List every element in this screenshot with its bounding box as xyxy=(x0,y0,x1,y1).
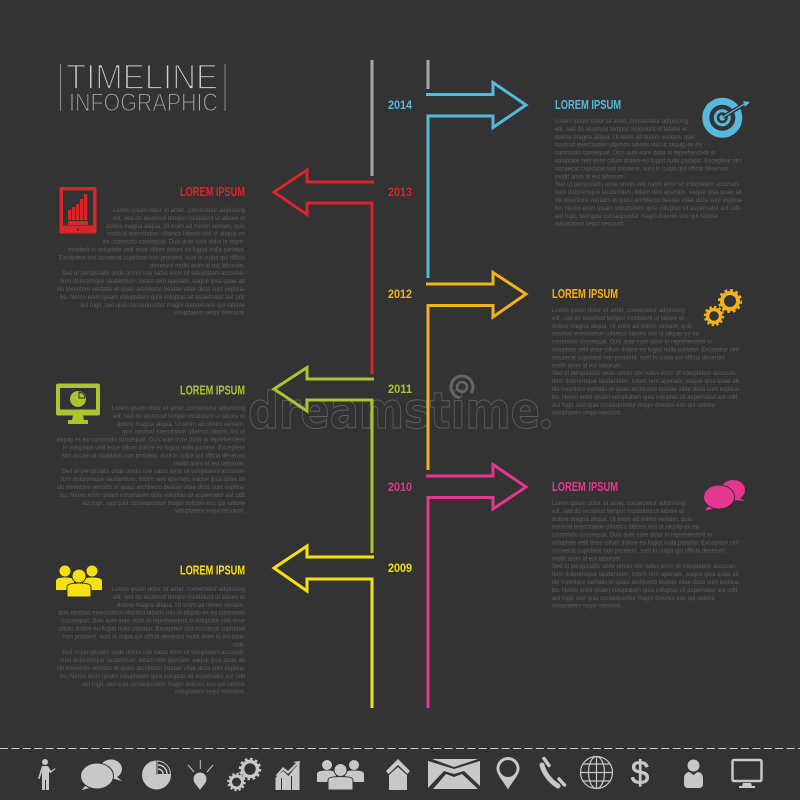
text block: 2014: illo inventore veritatis et quasi architecto beatae vitae dicta sunt explica- xyxy=(555,198,743,204)
text block: 2013: tium doloremque laudantium, totam rem aperiam, eaque ipsa quae ab xyxy=(60,279,246,285)
icon: target xyxy=(706,101,750,134)
timeline start segment: right xyxy=(426,60,430,89)
title xyxy=(60,58,226,117)
text block: 2011: Sed ut perspiciatis unde omnis iste natus error sit voluptatem accusan- xyxy=(62,469,245,475)
arrow: 2011 xyxy=(274,368,374,553)
year labels: 2012 xyxy=(388,289,412,301)
icon: dollar: $ xyxy=(631,754,649,791)
footer icon row xyxy=(38,754,762,791)
text block: 2012: aut fugit, sed quia consequuntur magni dolores eos qui ratione xyxy=(552,403,716,409)
text block: 2009: quis nostrud exercitation ullamco laboris nisi ut aliquip ex ea commodo xyxy=(58,611,246,617)
text block: 2012: mollit anim id est laborum. xyxy=(552,363,622,369)
icon: team xyxy=(317,760,364,790)
text block: 2013: dolore magna aliqua. Ut enim ad minim veniam, quis xyxy=(106,224,245,230)
text block: 2012: voluptatem sequi nesciunt. xyxy=(552,411,622,417)
text block: 2013: ea commodo consequat. Duis aute irure dolor in repre- xyxy=(103,240,245,246)
text block: 2009: bo. Nemo enim ipsam voluptatem quia voluptas sit aspernatur aut odit xyxy=(60,674,245,680)
panel: 2009 xyxy=(56,562,246,696)
text block: 2009: illo inventore veritatis et quasi architecto beatae vitae dicta sunt explica- xyxy=(57,666,245,672)
title: INFOGRAPHIC xyxy=(69,89,218,117)
text block: 2010: illo inventore veritatis et quasi architecto beatae vitae dicta sunt explica- xyxy=(552,580,740,586)
year labels: 2014 xyxy=(388,100,413,112)
text block: 2010: bo. Nemo enim ipsam voluptatem quia voluptas sit aspernatur aut odit xyxy=(552,588,737,594)
text block: 2012: dolore magna aliqua. Ut enim ad minim veniam, quis xyxy=(552,324,692,330)
icon: telephone xyxy=(542,758,564,786)
panel: 2014 xyxy=(555,97,750,228)
text block: 2012: commodo consequat. Duis aute irure dolor in reprehenderit in xyxy=(552,340,712,346)
text block: 2011: aliquip ex ea commodo consequat. Duis aute irure dolor in reprehenderit xyxy=(56,438,245,444)
panel: 2011 xyxy=(56,382,246,515)
arrow: 2013 xyxy=(274,170,374,374)
text block: 2014: aut fugit, sed quia consequuntur magni dolores eos qui ratione xyxy=(555,214,719,220)
text block: 2012: Sed ut perspiciatis unde omnis iste natus error sit voluptatem accusan- xyxy=(552,371,737,377)
text block: 2014: Sed ut perspiciatis unde omnis iste natus error sit voluptatem accusan- xyxy=(555,182,740,188)
arrow: 2009 xyxy=(274,546,374,708)
icon: monitor xyxy=(732,760,762,788)
text block: 2011: bo. Nemo enim ipsam voluptatem quia voluptas sit aspernatur aut odit xyxy=(60,493,245,499)
text block: 2012 xyxy=(552,308,740,417)
icon: presenter xyxy=(38,759,56,790)
text block: 2013: Lorem ipsum dolor sit amet, consectetur adipiscing xyxy=(113,208,245,214)
text block: 2009: cillum dolore eu fugiat nulla pariatur. Excepteur sint occaecat cupidatat xyxy=(58,626,245,632)
text block: 2014 xyxy=(555,119,743,228)
text block: 2011: sint occaecat cupidatat non proident, sunt in culpa qui officia deserunt xyxy=(62,453,245,459)
heading: 2014: LOREM IPSUM xyxy=(555,97,621,112)
heading: 2011: LOREM IPSUM xyxy=(180,382,245,398)
text block: 2009: non proident, sunt in culpa qui officia deserunt mollit anim id est labo- xyxy=(63,634,245,640)
text block: 2013: henderit in voluptate velit esse cillum dolore eu fugiat nulla pariatur. xyxy=(68,248,245,254)
heading: 2009: LOREM IPSUM xyxy=(180,562,245,578)
text block: 2010 xyxy=(552,501,740,610)
text block: 2014: voluptate velit esse cillum dolore eu fugiat nulla pariatur. Excepteur sint xyxy=(555,158,742,164)
text block: 2013: elit, sed do eiusmod tempor incididunt ut labore et xyxy=(113,216,245,222)
text block: 2011: dolore magna aliqua. Ut enim ad minim veniam, xyxy=(117,422,245,428)
watermark: dreamstime xyxy=(248,382,540,440)
heading: 2010: LOREM IPSUM xyxy=(552,479,618,494)
icon: speech bubbles xyxy=(704,480,745,510)
text block: 2014: tium doloremque laudantium, totam rem aperiam, eaque ipsa quae ab xyxy=(555,190,743,196)
icon: house xyxy=(386,759,410,790)
text block: 2013: nostrud exercitation ullamco laboris nisi ut aliquip ex xyxy=(107,232,245,238)
text block: 2010: commodo consequat. Duis aute irure dolor in reprehenderit in xyxy=(552,533,712,539)
text block: 2010: Lorem ipsum dolor sit amet, consectetur adipiscing xyxy=(552,501,685,507)
text block: 2010: aut fugit, sed quia consequuntur magni dolores eos qui ratione xyxy=(552,596,716,602)
text block: 2009: rum. xyxy=(233,642,245,648)
text block: 2014: dolore magna aliqua. Ut enim ad minim veniam, quis xyxy=(555,135,695,141)
text block: 2011: tium doloremque laudantium, totam rem aperiam, eaque ipsa quae ab xyxy=(60,477,246,483)
text block: 2013: illo inventore veritatis et quasi architecto beatae vitae dicta sunt explica- xyxy=(57,287,245,293)
icon: monitor xyxy=(56,384,100,424)
text block: 2011: quis nostrud exercitation ullamco laboris nisi ut xyxy=(122,430,245,436)
year labels: 2013 xyxy=(388,187,412,199)
year labels: 2009 xyxy=(388,563,412,575)
text block: 2014: Lorem ipsum dolor sit amet, consectetur adipiscing xyxy=(555,119,688,125)
text block: 2012: Lorem ipsum dolor sit amet, consectetur adipiscing xyxy=(552,308,685,314)
heading: 2012: LOREM IPSUM xyxy=(552,286,618,301)
text block: 2011: voluptatem sequi nesciunt. xyxy=(175,509,245,515)
text block: 2014: voluptatem sequi nesciunt. xyxy=(555,222,625,228)
text block: 2013: deserunt mollit anim id est laborum. xyxy=(150,263,245,269)
text block: 2009: Sed ut perspiciatis unde omnis iste natus error sit voluptatem accusan- xyxy=(62,650,245,656)
year labels: 2011 xyxy=(388,384,413,396)
text block: 2011: Lorem ipsum dolor sit amet, consectetur adipiscing xyxy=(112,406,245,412)
text block: 2013 xyxy=(57,208,246,317)
text block: 2012: bo. Nemo enim ipsam voluptatem quia voluptas sit aspernatur aut odit xyxy=(552,395,737,401)
text block: 2011: mollit anim id est laborum. xyxy=(174,461,245,467)
text block: 2010: elit, sed do eiusmod tempor incididunt ut labore et xyxy=(552,509,684,515)
arrow: 2014 xyxy=(426,82,526,278)
text block: 2009: voluptatem sequi nesciunt. xyxy=(175,690,245,696)
text block: 2009: dolore magna aliqua. Ut enim ad minim veniam, xyxy=(117,603,245,609)
year labels: 2010 xyxy=(388,482,412,494)
text block: 2009: tium doloremque laudantium, totam rem aperiam, eaque ipsa quae ab xyxy=(60,658,246,664)
panel: 2012 xyxy=(552,286,741,417)
text block: 2010: nostrud exercitation ullamco laboris nisi ut aliquip ex ea xyxy=(552,525,700,531)
text block: 2012: tium doloremque laudantium, totam rem aperiam, eaque ipsa quae ab xyxy=(552,379,740,385)
text block: 2010: mollit anim id est laborum. xyxy=(552,556,622,562)
icon: tablet with bar chart xyxy=(60,187,96,234)
text block: 2013: voluptatem sequi nesciunt. xyxy=(174,311,245,317)
text block: 2011: aut fugit, sed quia consequuntur magni dolores eos qui ratione xyxy=(82,501,246,507)
icon: globe xyxy=(580,756,612,788)
panel: 2013 xyxy=(57,184,246,317)
icon: growth chart xyxy=(276,761,300,790)
text block: 2014: occaecat cupidatat non proident, sunt in culpa qui officia deserunt xyxy=(555,166,728,172)
text block: 2010: tium doloremque laudantium, totam rem aperiam, eaque ipsa quae ab xyxy=(552,572,740,578)
text block: 2010: occaecat cupidatat non proident, sunt in culpa qui officia deserunt xyxy=(552,548,725,554)
icon: people xyxy=(56,566,102,597)
icon: gears xyxy=(705,290,741,325)
year labels xyxy=(388,100,413,575)
text block: 2012: illo inventore veritatis et quasi architecto beatae vitae dicta sunt explica- xyxy=(552,387,740,393)
icon: location pin xyxy=(496,757,520,790)
arrow: 2012 xyxy=(426,272,526,470)
text block: 2013: bo. Nemo enim ipsam voluptatem quia voluptas sit aspernatur aut odit xyxy=(60,295,245,301)
text block: 2009 xyxy=(57,587,246,696)
text block: 2012: nostrud exercitation ullamco laboris nisi ut aliquip ex ea xyxy=(552,332,700,338)
text block: 2009: consequat. Duis aute irure dolor in reprehenderit in voluptate velit esse xyxy=(62,619,246,625)
panel: 2010 xyxy=(552,479,745,610)
heading: 2013: LOREM IPSUM xyxy=(180,184,245,199)
text block: 2010: dolore magna aliqua. Ut enim ad minim veniam, quis xyxy=(552,517,692,523)
text block: 2011 xyxy=(56,406,246,515)
text block: 2013: Sed ut perspiciatis unde omnis iste natus error sit voluptatem accusan- xyxy=(62,271,245,277)
text block: 2014: commodo consequat. Duis aute irure dolor in reprehenderit in xyxy=(555,151,715,157)
text block: 2009: aut fugit, sed quia consequuntur magni dolores eos qui ratione xyxy=(82,682,246,688)
icon: pie chart xyxy=(142,760,172,790)
text block: 2014: elit, sed do eiusmod tempor incididunt ut labore et xyxy=(555,127,687,133)
text block: 2014: mollit anim id est laborum. xyxy=(555,174,625,180)
title: TIMELINE xyxy=(66,58,218,97)
text block: 2010: Sed ut perspiciatis unde omnis iste natus error sit voluptatem accusan- xyxy=(552,564,737,570)
text block: 2011: in voluptate velit esse cillum dolore eu fugiat nulla pariatur. Excepteur xyxy=(63,446,245,452)
text block: 2012: occaecat cupidatat non proident, sunt in culpa qui officia deserunt xyxy=(552,355,725,361)
text block: 2012: voluptate velit esse cillum dolore eu fugiat nulla pariatur. Excepteur sint xyxy=(552,348,739,354)
text block: 2009: elit, sed do eiusmod tempor incididunt ut labore et xyxy=(113,595,245,601)
icon: light bulb xyxy=(188,760,213,790)
timeline start segment: left xyxy=(370,60,374,176)
text block: 2011: illo inventore veritatis et quasi architecto beatae vitae dicta sunt explica- xyxy=(57,485,245,491)
text block: 2010: voluptatem sequi nesciunt. xyxy=(552,604,622,610)
arrow: 2010 xyxy=(426,464,526,708)
icon: gears xyxy=(228,759,260,790)
text block: 2013: Excepteur sint occaecat cupidatat non proident, sunt in culpa qui officia xyxy=(59,255,246,261)
text block: 2014: nostrud exercitation ullamco laboris nisi ut aliquip ex ea xyxy=(555,143,703,149)
text block: 2013: aut fugit, sed quia consequuntur magni dolores eos qui ratione xyxy=(80,303,246,309)
icon: user xyxy=(684,760,703,788)
text block: 2009: Lorem ipsum dolor sit amet, consectetur adipiscing xyxy=(112,587,245,593)
text block: 2010: voluptate velit esse cillum dolore eu fugiat nulla pariatur. Excepteur sint xyxy=(552,540,739,546)
text block: 2011: elit, sed do eiusmod tempor incididunt ut labore et xyxy=(113,414,245,420)
footer divider xyxy=(0,748,800,750)
text block: 2014: bo. Nemo enim ipsam voluptatem quia voluptas sit aspernatur aut odit xyxy=(555,206,740,212)
icon: envelope xyxy=(428,759,480,789)
icon: chat bubbles xyxy=(80,760,122,790)
text block: 2012: elit, sed do eiusmod tempor incididunt ut labore et xyxy=(552,316,684,322)
